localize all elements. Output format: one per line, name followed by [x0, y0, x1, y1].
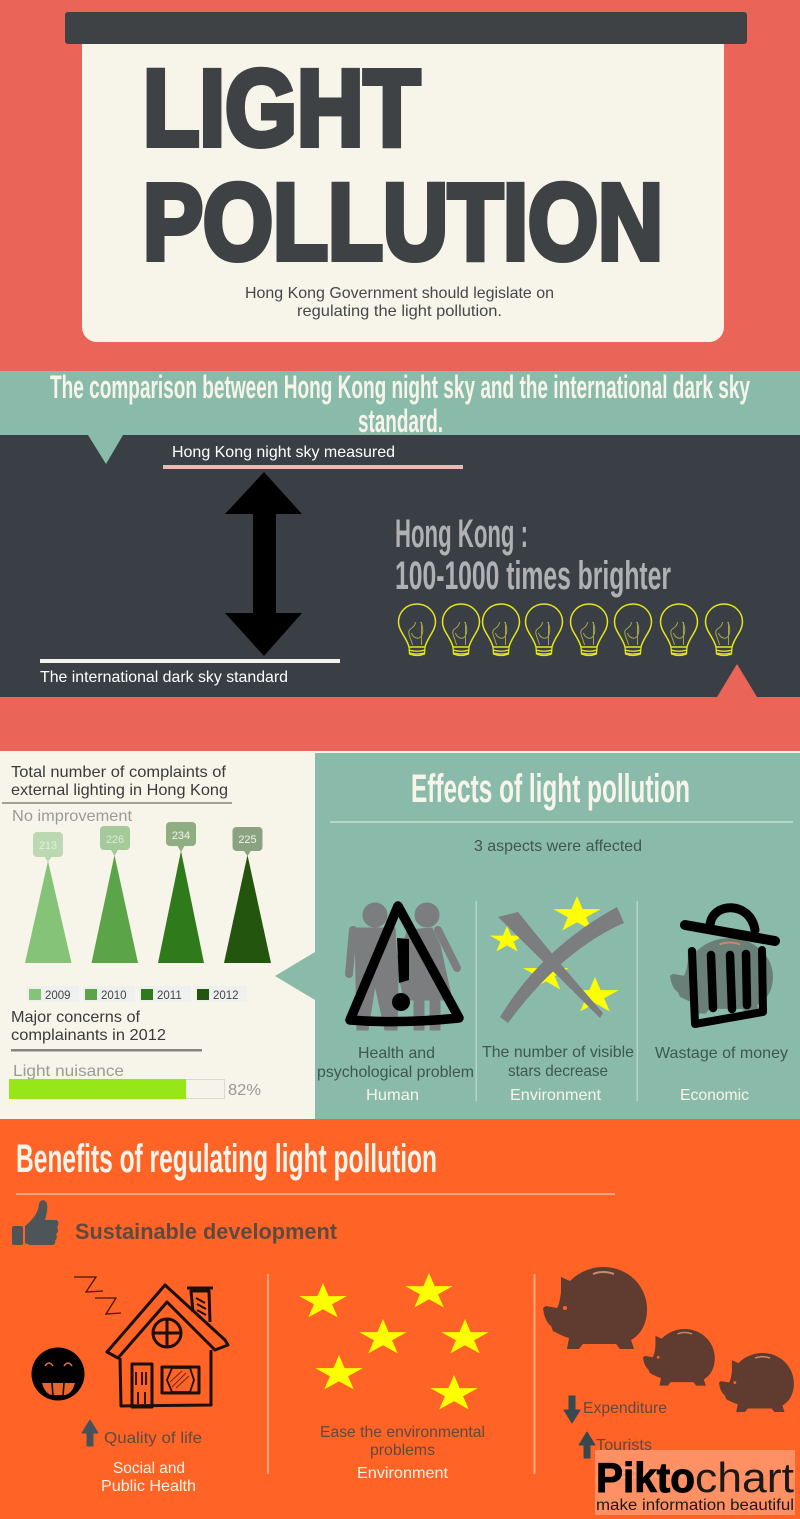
bar: light nuisance 82%: [9, 1063, 261, 1099]
icon: stars: [299, 1273, 489, 1409]
label: social and public health: Social and: [113, 1460, 185, 1477]
panel: effects: [275, 753, 800, 1119]
labels: human: [317, 1045, 474, 1104]
subtitle: Hong Kong Government should legislate on: [245, 285, 554, 302]
label: ease environmental problems: Ease the environmental: [320, 1424, 485, 1441]
labels: environment: [482, 1044, 634, 1104]
legend: [27, 986, 247, 1002]
icons: light bulbs: [398, 604, 742, 656]
panel: complaints: [0, 753, 315, 1119]
card top bar: [65, 12, 747, 44]
icon: thumbs up: [12, 1200, 58, 1245]
labels: environment: stars decrease: [508, 1063, 608, 1080]
title: [143, 47, 663, 282]
section heading: [50, 369, 750, 439]
callout: 100-1000 times brighter: Hong Kong :: [395, 512, 528, 556]
labels: human: Human: [366, 1087, 419, 1104]
heading: major concerns: Major concerns of: [11, 1009, 141, 1026]
heading: complaints: Total number of complaints of: [11, 764, 227, 781]
labels: economic: Economic: [680, 1087, 749, 1104]
label: ease environmental problems: [320, 1424, 485, 1459]
title: POLLUTION: [143, 161, 663, 282]
label: tourists: [579, 1432, 652, 1458]
bar: light nuisance 82%: 82%: [228, 1082, 261, 1099]
subtitle: [245, 285, 554, 320]
legend: 2011: [157, 990, 182, 1002]
label: international standard: The international dark sky standard: [40, 669, 288, 686]
section heading: standard.: [358, 403, 443, 439]
label: social and public health: Public Health: [101, 1478, 196, 1495]
chart: triangle bars: 234: [172, 830, 190, 842]
subheading: 3 aspects were affected: [474, 838, 642, 855]
title: LIGHT: [143, 47, 420, 168]
panel: comparison: [0, 369, 800, 697]
icon: people with warning sign: [349, 903, 459, 1030]
watermark: Piktochart: make information beautiful: [596, 1497, 794, 1514]
watermark: Piktochart: chart: [695, 1454, 794, 1501]
legend: 2012: [213, 990, 239, 1002]
arrow: double headed: [225, 472, 302, 656]
heading: major concerns: [11, 1009, 166, 1044]
legend: 2009: [45, 990, 71, 1002]
label: quality of life: [82, 1420, 202, 1447]
pointer: teal: [88, 435, 123, 464]
labels: human: Health and: [358, 1045, 435, 1062]
heading: benefits: Benefits of regulating light pollution: [16, 1137, 437, 1181]
subheading: Sustainable development: [75, 1219, 338, 1244]
chart: triangle bars: 225: [238, 834, 257, 846]
labels: economic: Wastage of money: [655, 1045, 788, 1062]
label: social and public health: [101, 1460, 196, 1495]
title card: [65, 12, 747, 342]
chart: triangle bars: 213: [39, 840, 57, 852]
dividers: [476, 901, 638, 1101]
chart: triangle bars: [25, 822, 271, 963]
icon: house: [107, 1285, 228, 1407]
label: environment: Environment: [357, 1465, 449, 1482]
icon: stars crossed out: [490, 896, 624, 1023]
label: ease environmental problems: problems: [370, 1442, 435, 1459]
label: tourists: Tourists: [596, 1437, 652, 1454]
labels: environment: Environment: [510, 1087, 602, 1104]
label: economic: Economic: [618, 1465, 687, 1482]
legend: 2010: [101, 990, 127, 1002]
dividers: [267, 1274, 536, 1474]
label: expenditure: [564, 1396, 667, 1423]
bar: light nuisance 82%: Light nuisance: [13, 1063, 124, 1080]
label: international standard: [40, 659, 340, 686]
pointer: teal: [275, 952, 315, 1000]
chart: triangle bars: 226: [106, 834, 124, 846]
background: coral header: [0, 0, 800, 371]
panel: benefits: [0, 1119, 800, 1519]
subtitle: regulating the light pollution.: [297, 303, 502, 320]
watermark: Piktochart: [595, 1450, 795, 1515]
heading: complaints: [11, 764, 228, 799]
labels: environment: The number of visible: [482, 1044, 634, 1061]
band: coral divider: [0, 664, 800, 753]
label: Hong Kong measured: Hong Kong night sky measured: [172, 444, 395, 461]
icon: smiley: [32, 1348, 84, 1400]
heading: major concerns: complainants in 2012: [11, 1027, 166, 1044]
heading: complaints: external lighting in Hong Kong: [11, 782, 228, 799]
icon: money in trash: [670, 908, 775, 1024]
label: quality of life: Quality of life: [104, 1430, 202, 1447]
callout: 100-1000 times brighter: [395, 512, 671, 598]
icons: piggy banks: [543, 1267, 794, 1412]
labels: human: psychological problem: [317, 1064, 474, 1081]
icon: zzz: [74, 1277, 121, 1314]
note: no improvement: No improvement: [12, 808, 133, 825]
labels: economic: [655, 1045, 788, 1104]
label: expenditure: Expenditure: [583, 1400, 667, 1417]
watermark: Piktochart: Pikto: [596, 1454, 695, 1501]
